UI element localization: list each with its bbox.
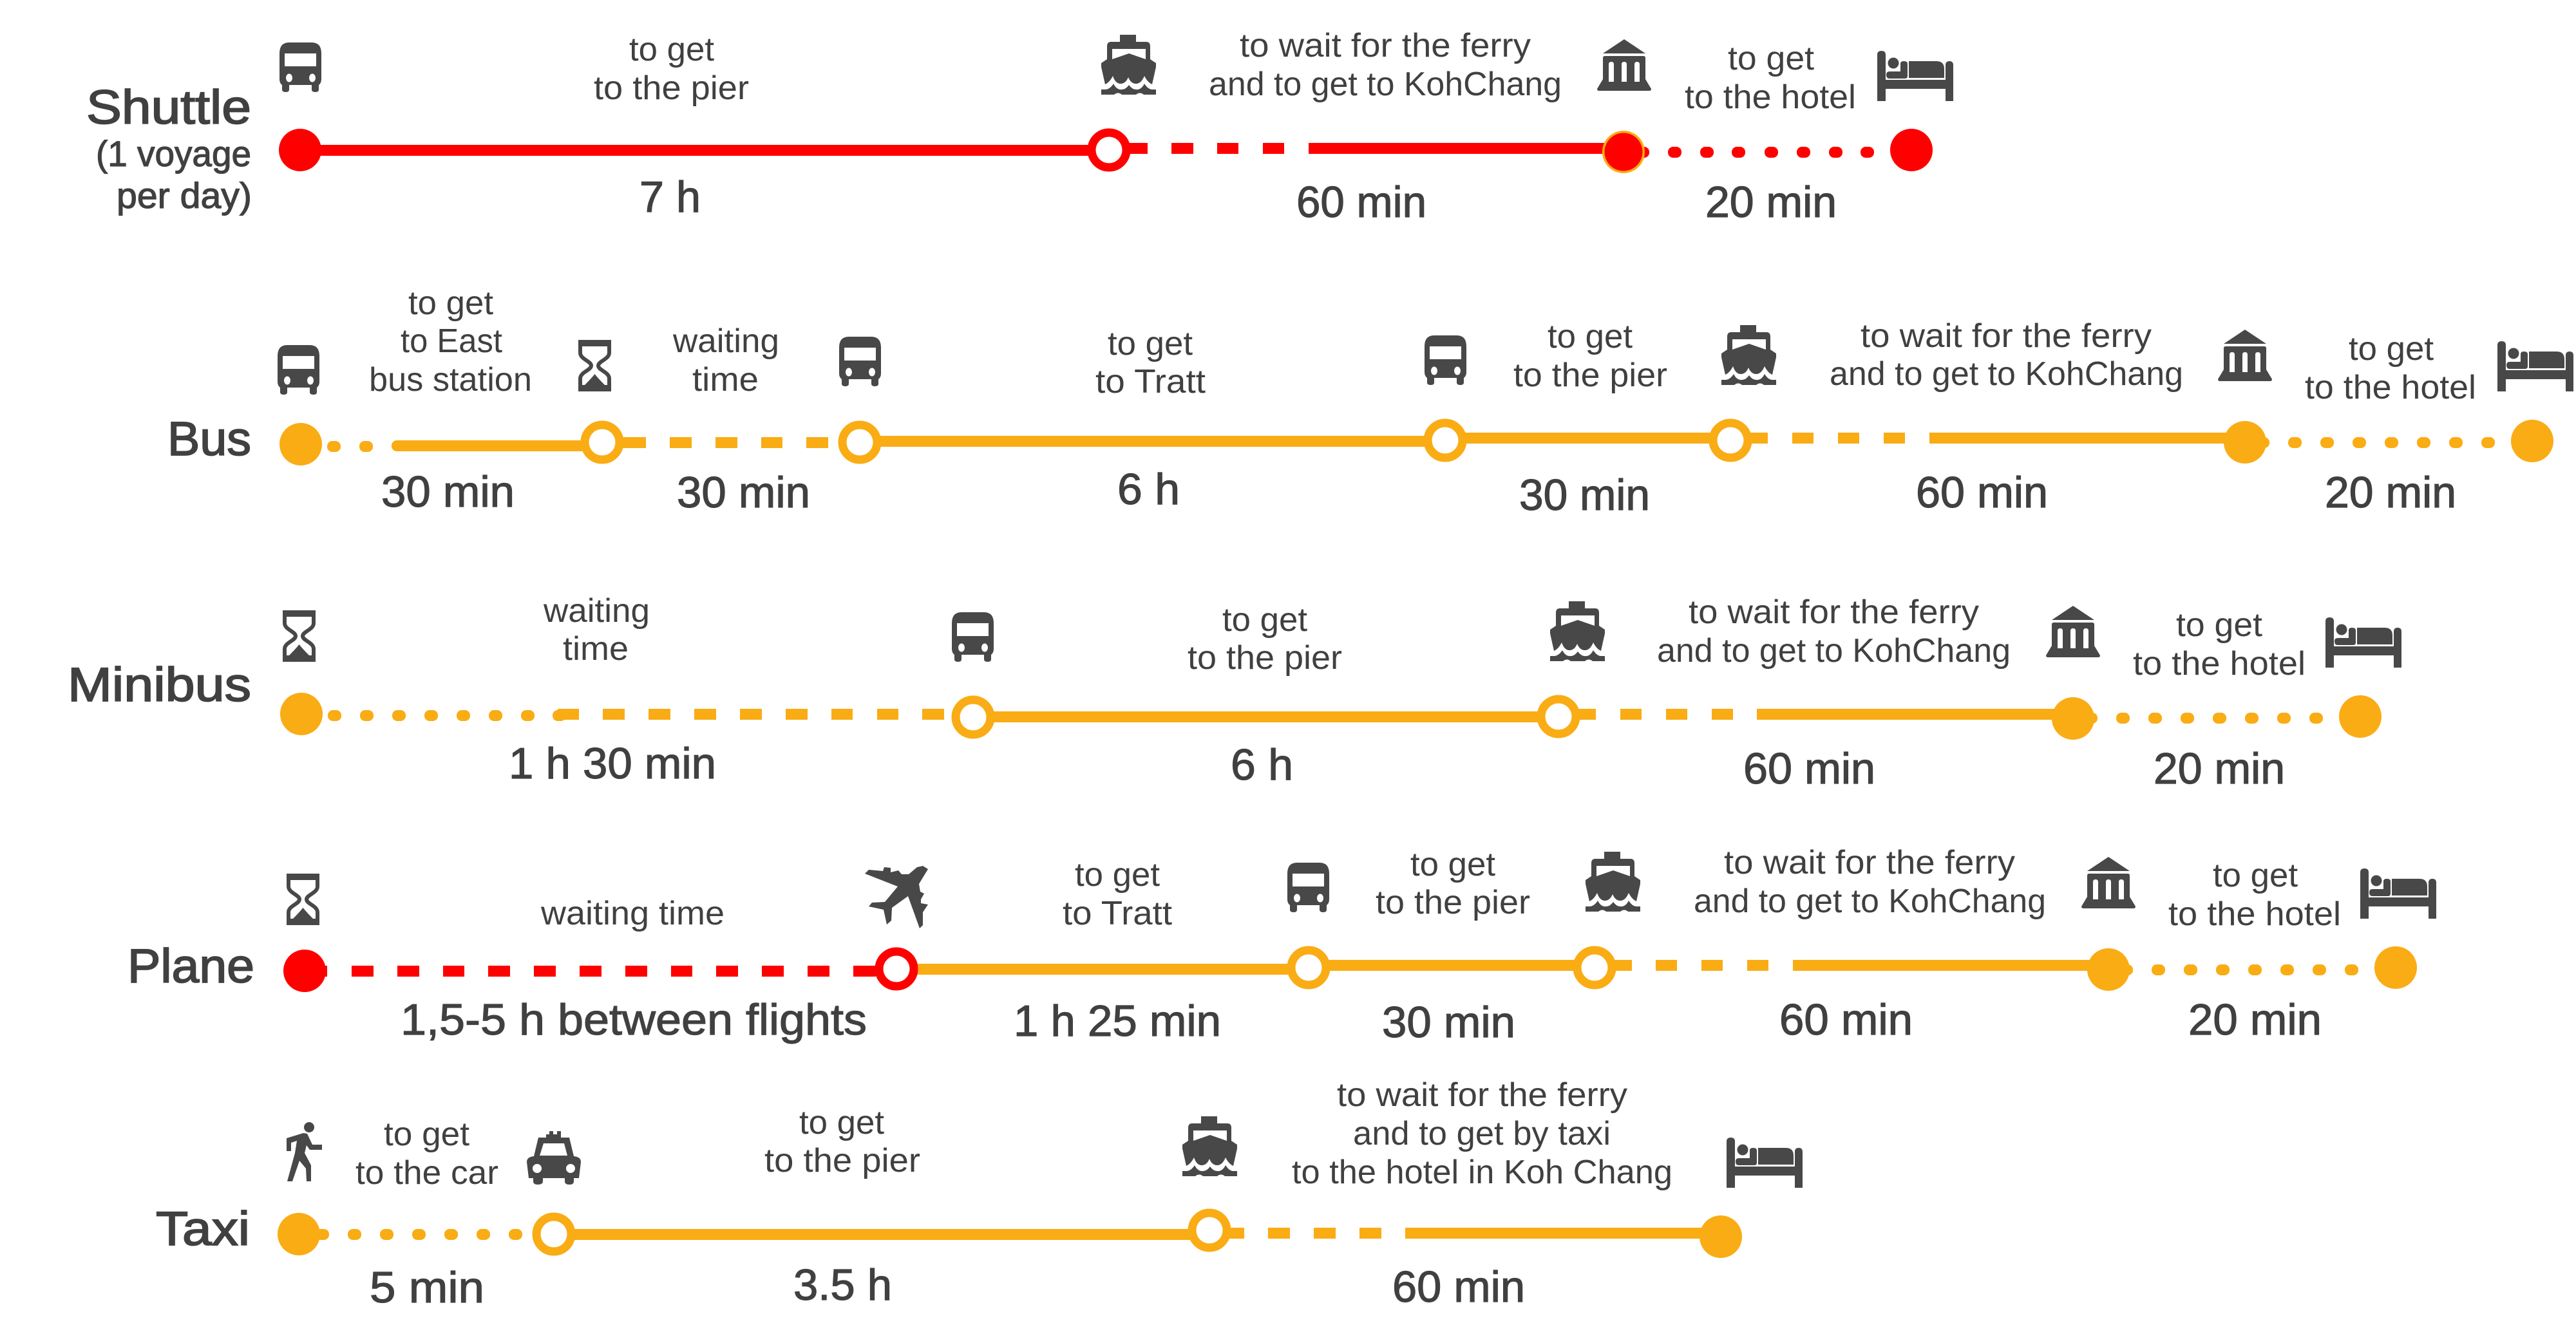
label: to get to Tratt: to Tratt [1063,895,1173,932]
duration: 30 min: 30 min [1519,471,1650,520]
icon: ferry [1586,852,1640,912]
label: to get to the hotel: to get [2349,330,2434,368]
icon: hourglass [283,610,316,662]
label: to get to Tratt: to get [1108,325,1193,362]
label: to get to the hotel: to the hotel [2168,896,2341,933]
duration: 1 h 25 min: 1 h 25 min [1014,997,1221,1046]
timeline: bus [279,420,2553,465]
label: to get to the hotel [2133,606,2306,682]
label: to wait for the ferry, taxi to hotel [1292,1076,1672,1191]
label: to wait for the ferry: and to get to KohChang [1694,883,2046,920]
icon: walking person [287,1122,322,1181]
label: to wait for the ferry: to wait for the ferry [1240,27,1531,64]
icon: bus [952,612,994,662]
label: to wait for the ferry [1657,594,2011,670]
row: Minibus [68,592,2401,793]
duration: 60 min: 60 min [1743,744,1875,793]
icon: bed [2360,868,2436,919]
icon: plane [865,866,928,928]
heading: Minibus: Minibus [68,658,251,711]
label: to wait for the ferry: and to get to KohChang [1209,66,1562,103]
duration: 5 min: 5 min [370,1263,484,1312]
label: waiting time: waiting [672,323,779,360]
duration: 20 min: 20 min [2188,995,2322,1044]
label: waiting time: waiting [543,592,650,630]
timeline: plane [283,946,2417,992]
heading: Shuttle: Shuttle [86,80,251,134]
duration: 20 min: 20 min [2154,744,2285,793]
duration: 60 min: 60 min [1916,468,2048,517]
row: Taxi [156,1076,1803,1312]
label: to get to the pier: to get [629,31,715,68]
label: to wait for the ferry: to wait for the ferry [1724,844,2015,881]
icon: pier building [2218,330,2272,381]
icon: bed [1877,51,1953,101]
label: to wait for the ferry [1830,317,2183,393]
duration: 1 h 30 min: 1 h 30 min [509,739,716,788]
label: to get to East bus station: to get [408,285,494,322]
label: to get to the pier: to get [1410,846,1496,883]
label: to get to Tratt: to Tratt [1095,363,1206,400]
label: to get to the pier [1188,601,1342,677]
label: to get to the car [355,1116,498,1192]
label: to get to East bus station: bus station [369,361,532,399]
label: to get to the pier: to the pier [1188,639,1342,677]
label: to wait for the ferry [1694,844,2046,920]
duration: 30 min: 30 min [381,467,515,516]
icon: pier building [2081,857,2136,908]
icon: ferry [1721,325,1776,385]
label: to get to Tratt [1063,856,1173,932]
label: to wait for the ferry: and to get to KohChang [1657,632,2011,670]
label: to wait for the ferry: to wait for the ferry [1689,594,1979,631]
label: to wait for the ferry, taxi to hotel: and to get by taxi [1353,1115,1611,1152]
label: to get to the pier: to the pier [1513,357,1667,394]
icon: bus [1425,335,1466,385]
icon: pier building [2046,606,2100,657]
label: to get to the pier [1513,318,1667,394]
duration: 30 min: 30 min [1382,998,1515,1047]
label: to get to the hotel [1685,40,1856,116]
label: to get to the pier [1376,846,1530,921]
duration: 1,5-5 h between flights: 1,5-5 h between flights [401,995,867,1044]
icon: bed [2497,341,2573,391]
icon: bus [279,42,321,92]
icon: bus [278,345,319,395]
label: to wait for the ferry, taxi to hotel: to the hotel in Koh Chang [1292,1154,1672,1191]
icon: hourglass [287,874,319,925]
label: to wait for the ferry: and to get to KohChang [1830,355,2183,393]
label: to get to Tratt [1095,325,1206,400]
label: to get to the pier [764,1104,920,1179]
heading: Bus: Bus [167,412,251,465]
icon: ferry [1101,35,1156,95]
label: to get to the hotel [2305,330,2476,406]
label: to get to the hotel: to the hotel [2305,369,2476,406]
timeline: taxi [278,1213,1742,1258]
duration: 20 min: 20 min [2325,468,2456,517]
timeline: minibus [280,693,2382,740]
icon: pier building [1597,39,1651,91]
icon: bed [2325,617,2401,668]
duration: 60 min: 60 min [1296,178,1426,227]
duration: 60 min: 60 min [1392,1262,1525,1311]
duration: 7 h: 7 h [639,173,701,221]
label: to get to the pier: to get [799,1104,885,1141]
duration: 20 min: 20 min [1705,178,1837,227]
duration: 6 h: 6 h [1231,740,1293,789]
label: to get to the hotel: to get [1728,40,1815,77]
duration: 30 min: 30 min [677,468,810,517]
label: to get to the car: to the car [355,1154,498,1192]
heading: Plane: Plane [128,939,254,993]
label: waiting time: time [692,361,759,399]
label: to get to the hotel: to the hotel [1685,79,1856,116]
label: waiting time [543,592,650,668]
icon: ferry [1550,601,1605,661]
timeline: shuttle [279,129,1933,173]
label: to get to the pier: to get [1222,601,1308,639]
row: Bus [167,285,2573,520]
label: waiting time [672,323,779,399]
label: waiting time: waiting time [540,895,724,932]
label: to wait for the ferry: to wait for the ferry [1861,317,2152,355]
icon: ferry [1182,1116,1237,1176]
label: to get to the pier: to the pier [764,1142,920,1179]
label: to get to the pier [594,31,749,107]
label: to get to the pier: to the pier [594,70,749,107]
icon: taxi [527,1131,581,1185]
label: waiting time: time [563,630,629,668]
label: to get to the hotel: to get [2176,606,2263,644]
heading: Taxi: Taxi [156,1202,250,1255]
icon: bus [1287,863,1329,912]
label: to get to the pier: to the pier [1376,884,1530,921]
label: to wait for the ferry [1209,27,1562,103]
label: to get to Tratt: to get [1075,856,1160,894]
subheading: voyage frequency: (1 voyage [96,133,251,174]
duration: 60 min: 60 min [1779,995,1913,1044]
row: Shuttle [86,27,1953,227]
duration: 6 h: 6 h [1117,465,1180,514]
icon: bus [839,337,881,386]
row: Plane [128,844,2436,1047]
label: to get to East bus station: to East [401,323,503,360]
subheading: voyage frequency: per day) [117,175,252,216]
label: to get to East bus station [369,285,532,399]
label: to get to the hotel [2168,857,2341,933]
icon: bed [1727,1138,1803,1188]
label: to get to the hotel: to the hotel [2133,645,2306,682]
duration: 3.5 h: 3.5 h [793,1261,892,1309]
subheading: voyage frequency [96,133,252,216]
label: to get to the hotel: to get [2213,857,2298,894]
icon: hourglass [578,340,611,391]
label: to wait for the ferry, taxi to hotel: to wait for the ferry [1337,1076,1627,1114]
label: to get to the car: to get [384,1116,470,1153]
label: to get to the pier: to get [1548,318,1633,355]
